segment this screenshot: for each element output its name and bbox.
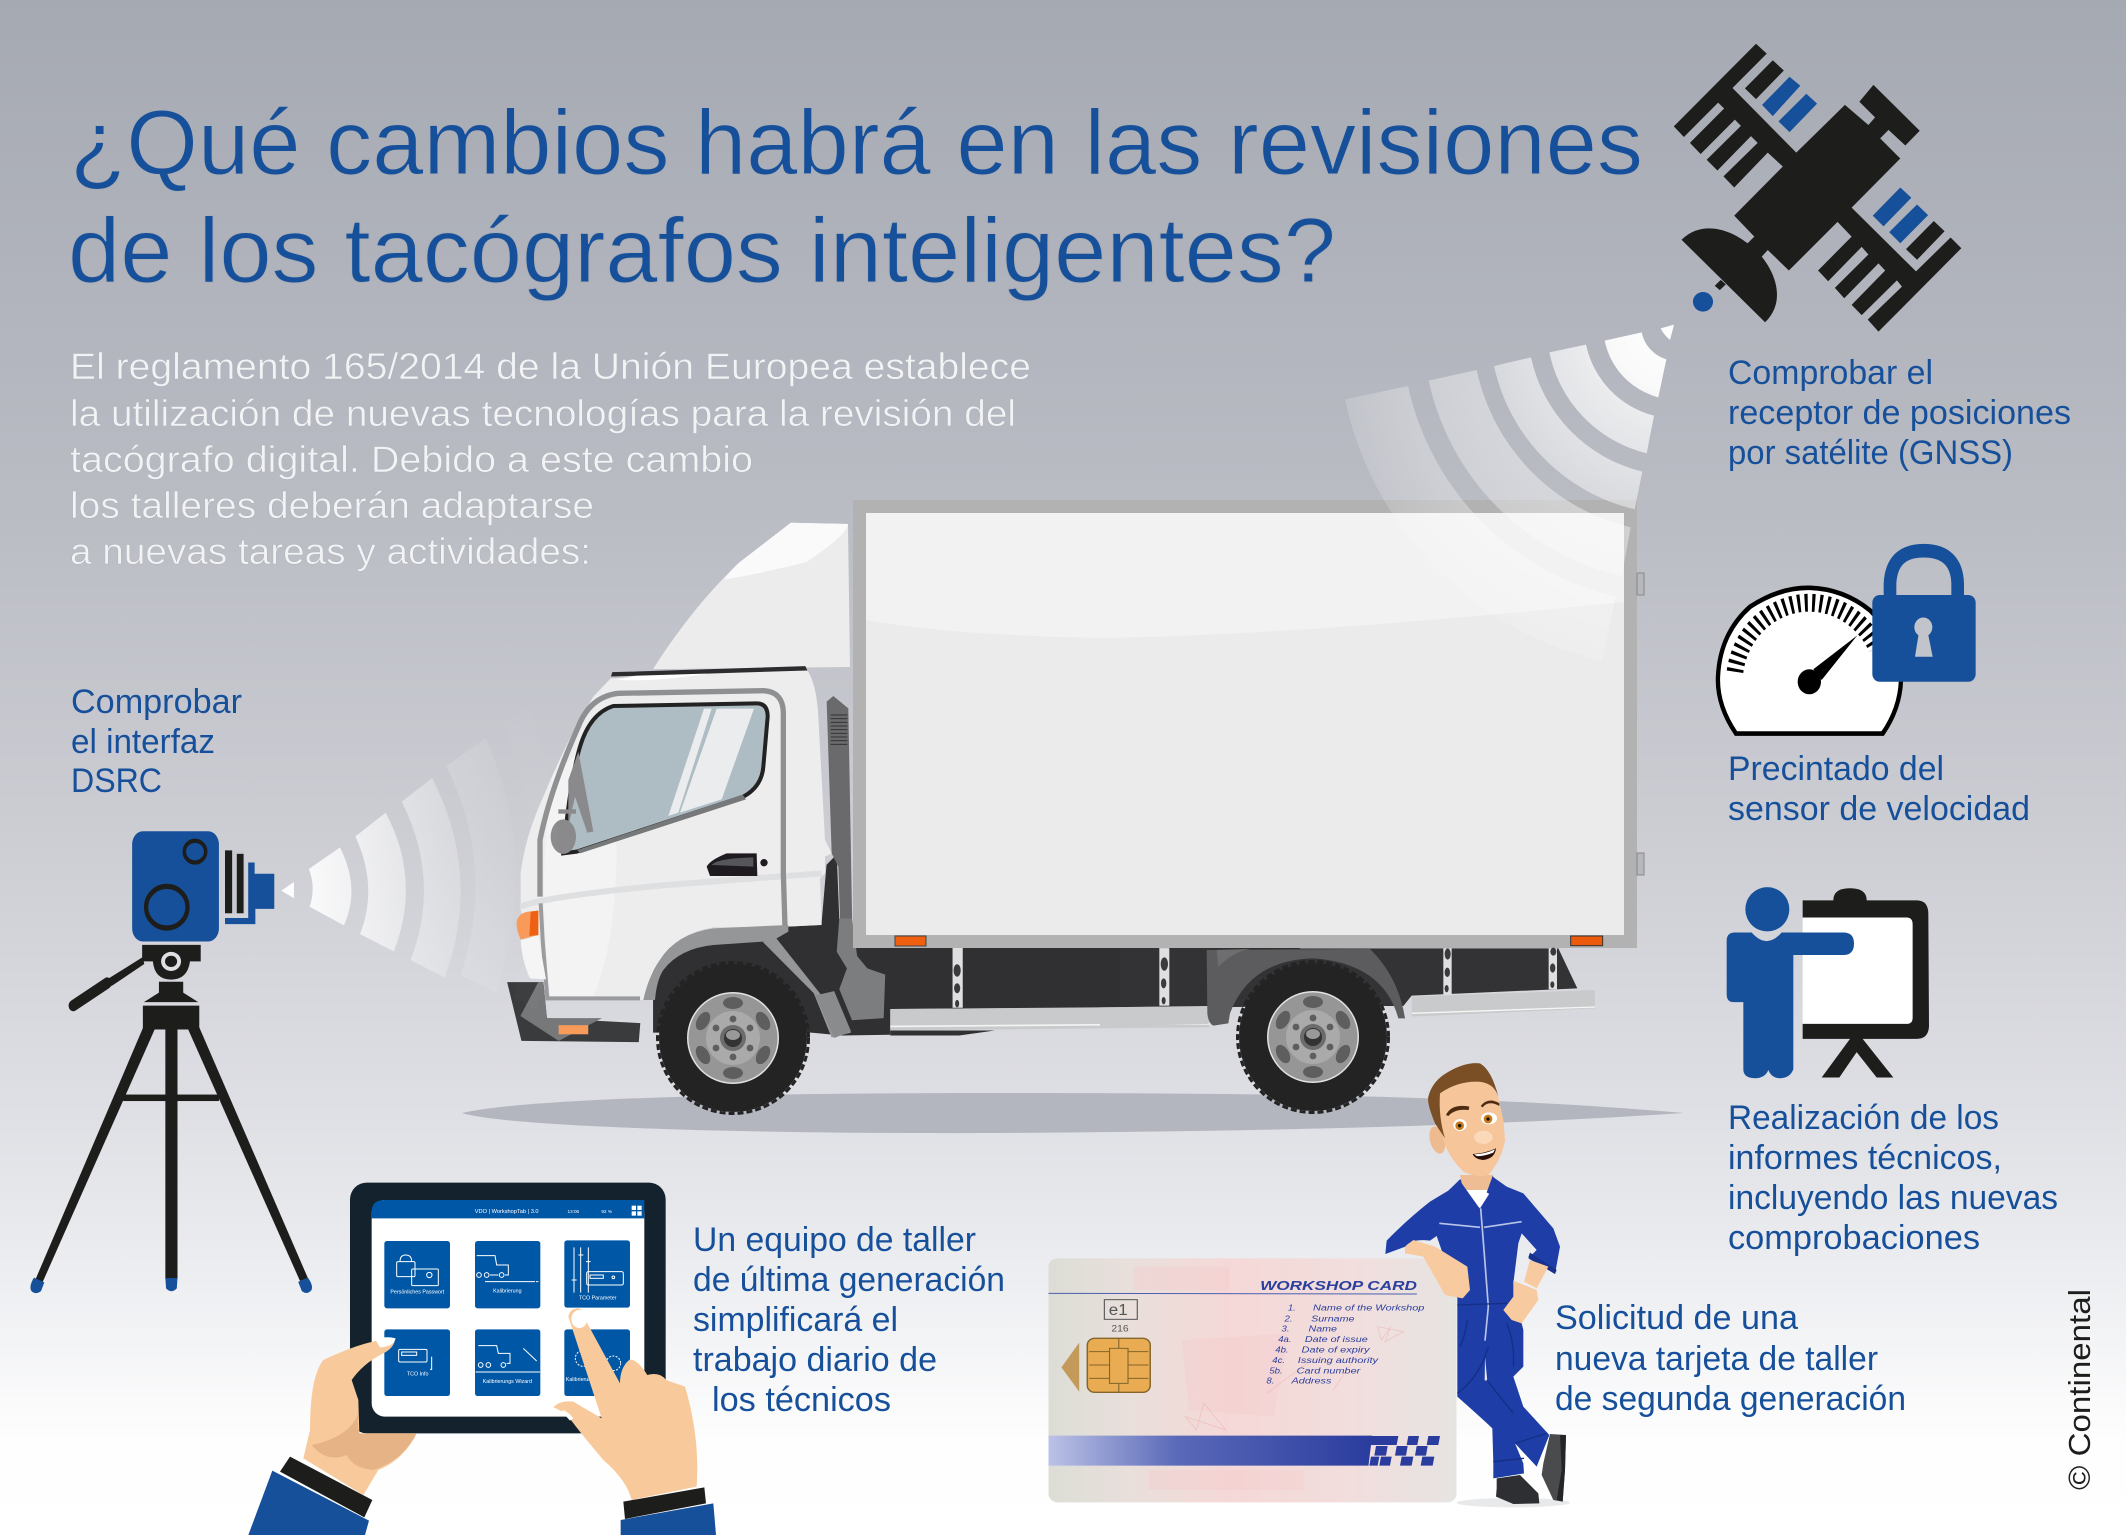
workshop card: WORKSHOP CARD bbox=[1260, 1279, 1417, 1293]
truck bbox=[507, 500, 1644, 1114]
tablet: Kalibrierung bbox=[566, 1377, 594, 1383]
tablet: 92 % bbox=[601, 1209, 612, 1214]
workshop card: 216 bbox=[1111, 1324, 1129, 1335]
satellite signal waves bbox=[1345, 325, 1674, 661]
label: speed sensor: sensor de velocidad bbox=[1728, 790, 2030, 828]
intro text block: la utilización de nuevas tecnologías para la revisión del bbox=[70, 393, 1016, 434]
label: technical reports: comprobaciones bbox=[1728, 1219, 1980, 1257]
label: technical reports: informes técnicos, bbox=[1728, 1139, 2002, 1177]
truck rear chassis bbox=[1100, 936, 1603, 1027]
workshop card: 3. bbox=[1282, 1324, 1290, 1334]
label: workshop card: nueva tarjeta de taller bbox=[1555, 1340, 1878, 1378]
workshop card: Name of the Workshop bbox=[1313, 1303, 1424, 1313]
tablet bbox=[350, 1183, 666, 1433]
workshop card: 8. bbox=[1266, 1376, 1274, 1386]
label: workshop tablet: Un equipo de taller bbox=[693, 1221, 976, 1259]
label: workshop card bbox=[1555, 1299, 1906, 1418]
label: workshop tablet: de última generación bbox=[693, 1261, 1005, 1299]
tablet: Kalibrierung bbox=[493, 1288, 522, 1294]
workshop card: 4c. bbox=[1272, 1355, 1285, 1365]
tablet: TCO Info bbox=[407, 1372, 429, 1378]
label: workshop tablet: simplificará el bbox=[693, 1301, 898, 1339]
label: GNSS: Comprobar el bbox=[1728, 354, 1933, 392]
intro text block: a nuevas tareas y actividades: bbox=[70, 531, 591, 572]
label: technical reports: Realización de los bbox=[1728, 1099, 1999, 1137]
rear wheel bbox=[1238, 962, 1388, 1112]
label: speed sensor bbox=[1728, 750, 2030, 828]
tablet: TCO Parameter bbox=[579, 1295, 617, 1301]
label: DSRC: DSRC bbox=[71, 762, 162, 800]
label: DSRC: Comprobar bbox=[71, 683, 242, 721]
truck fairing and chassis bbox=[653, 523, 1300, 1036]
tablet in hands bbox=[248, 1183, 716, 1535]
workshop card: Address bbox=[1290, 1376, 1332, 1386]
workshop card: e1 bbox=[1109, 1302, 1128, 1319]
truck cargo box bbox=[853, 500, 1644, 948]
label: workshop tablet: trabajo diario de bbox=[693, 1341, 937, 1379]
tablet: 13:06 bbox=[568, 1209, 580, 1214]
label: GNSS: por satélite (GNSS) bbox=[1728, 434, 2013, 472]
intro text block bbox=[70, 346, 1031, 572]
shoes bbox=[1496, 1434, 1566, 1504]
workshop card: Issuing authority bbox=[1298, 1355, 1380, 1365]
title: de los tacógrafos inteligentes? bbox=[68, 200, 1336, 302]
label: GNSS: receptor de posiciones bbox=[1728, 394, 2071, 432]
label: speed sensor: Precintado del bbox=[1728, 750, 1944, 788]
workshop card: 4a. bbox=[1278, 1334, 1292, 1344]
jumpsuit bbox=[1385, 1176, 1560, 1478]
label: DSRC: el interfaz bbox=[71, 723, 215, 761]
hands bbox=[1405, 1240, 1548, 1323]
label: DSRC bbox=[71, 683, 242, 800]
workshop card: Card number bbox=[1297, 1366, 1361, 1375]
label: technical reports: incluyendo las nuevas bbox=[1728, 1179, 2058, 1217]
intro text block: tacógrafo digital. Debido a este cambio bbox=[70, 439, 753, 480]
right hand bbox=[553, 1308, 716, 1535]
label: technical reports bbox=[1728, 1099, 2058, 1257]
workshop card: Surname bbox=[1311, 1314, 1354, 1323]
copyright: © Continental bbox=[2062, 1289, 2097, 1490]
tripod bbox=[36, 945, 308, 1283]
workshop card: 1. bbox=[1288, 1303, 1296, 1313]
workshop card: 4b. bbox=[1275, 1345, 1289, 1355]
truck step, bumper and strut bbox=[507, 919, 1209, 1042]
mechanic head bbox=[1427, 1063, 1507, 1208]
front wheel bbox=[658, 962, 808, 1114]
workshop card: 2. bbox=[1283, 1314, 1293, 1323]
label: workshop card: de segunda generación bbox=[1555, 1380, 1906, 1418]
workshop card bbox=[1048, 1258, 1456, 1502]
label: workshop tablet: los técnicos bbox=[712, 1381, 891, 1419]
label: workshop card: Solicitud de una bbox=[1555, 1299, 1798, 1337]
icon: satellite bbox=[1674, 44, 1961, 332]
icon: DSRC camera on tripod bbox=[30, 831, 312, 1293]
card checker pattern bbox=[1368, 1436, 1440, 1466]
workshop card: Date of expiry bbox=[1302, 1345, 1371, 1355]
camera bbox=[132, 831, 274, 941]
icon: presenter at board bbox=[1727, 887, 1929, 1078]
icon: speedometer with padlock bbox=[1718, 551, 1976, 734]
workshop card: Date of issue bbox=[1305, 1334, 1368, 1344]
DSRC signal waves bbox=[281, 706, 559, 1010]
truck cab bbox=[517, 667, 853, 1000]
intro text block: los talleres deberán adaptarse bbox=[70, 485, 594, 526]
mechanic character bbox=[1368, 1176, 1570, 1507]
left hand bbox=[248, 1337, 417, 1535]
intro text block: El reglamento 165/2014 de la Unión Europea establece bbox=[70, 346, 1031, 387]
title: ¿Qué cambios habrá en las revisiones bbox=[70, 92, 1643, 194]
ground shadow of truck bbox=[462, 1093, 1684, 1133]
label: GNSS bbox=[1728, 354, 2071, 472]
tablet: Kalibrierungs Wizard bbox=[483, 1379, 532, 1385]
tablet: VDO | WorkshopTab | 3.0 bbox=[475, 1209, 539, 1215]
title bbox=[68, 92, 1643, 302]
workshop card: 5b. bbox=[1269, 1366, 1283, 1375]
workshop card: Name bbox=[1309, 1324, 1337, 1334]
label: workshop tablet bbox=[693, 1221, 1005, 1419]
tablet: Persönliches Passwort bbox=[390, 1289, 445, 1295]
floor shadow bbox=[1457, 1498, 1570, 1507]
tripod feet bbox=[30, 1278, 312, 1293]
